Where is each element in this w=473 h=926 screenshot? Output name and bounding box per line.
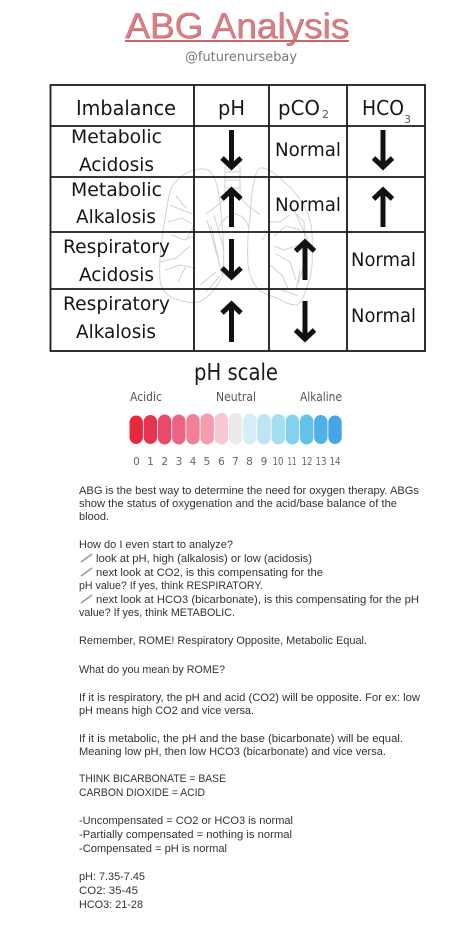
pH colour bar	[130, 413, 342, 444]
pH scale numbers: 8	[246, 456, 253, 468]
arrow: respiratory acidosis pH down	[222, 239, 241, 277]
row: respiratory alkalosis	[63, 293, 416, 343]
row: respiratory acidosis: Normal	[351, 249, 416, 271]
table grid	[50, 85, 425, 351]
pH scale labels	[130, 389, 342, 404]
pH scale numbers: 7	[232, 456, 239, 468]
icon: pen 3	[81, 595, 92, 603]
text block: ROME: Remember, ROME! Respiratory Opposite, Metabolic Equal.	[79, 635, 367, 647]
table	[50, 85, 425, 351]
text block: intro: ABG is the best way to determine the need for oxygen therapy. ABGs	[79, 485, 420, 497]
row: metabolic acidosis	[71, 126, 341, 176]
text block: how to analyze: next look at HCO3 (bicarbonate), is this compensating for the pH	[96, 594, 419, 606]
text block: intro: show the status of oxygenation and the acid/base balance of the	[79, 498, 397, 510]
arrow: respiratory alkalosis pH up	[222, 304, 241, 342]
title: ABG Analysis	[126, 6, 350, 47]
table header row: Imbalance	[76, 96, 176, 120]
row: respiratory alkalosis: Respiratory	[63, 293, 170, 315]
pH scale numbers: 12	[302, 456, 312, 468]
text block: ROME explained: If it is respiratory, the pH and acid (CO2) will be opposite. For ex: low	[79, 692, 420, 704]
pH scale labels: Neutral	[216, 389, 256, 404]
icon: pen 1	[81, 554, 92, 562]
pH scale numbers: 2	[161, 456, 168, 468]
text block: compensation: -Compensated = pH is normal	[79, 843, 227, 855]
table header row: 2	[322, 108, 329, 121]
row: metabolic alkalosis: Normal	[275, 194, 341, 216]
arrow: respiratory acidosis pCO2 up	[296, 242, 314, 280]
text block: normal values: HCO3: 21-28	[79, 899, 143, 911]
text block: how to analyze: look at pH, high (alkalosis) or low (acidosis)	[96, 553, 312, 565]
pH scale numbers: 6	[218, 456, 225, 468]
row: metabolic alkalosis: Metabolic	[71, 179, 162, 201]
pH scale numbers: 10	[272, 456, 284, 468]
pH scale numbers: 14	[330, 456, 341, 468]
subtitle: handle: @futurenursebay	[185, 50, 297, 65]
text block: compensation: -Partially compensated = nothing is normal	[79, 829, 292, 841]
table header row: pH	[218, 96, 245, 120]
table header row: pCO	[278, 96, 320, 120]
row: metabolic acidosis: Normal	[275, 139, 341, 161]
arrow: metabolic acidosis pH down	[222, 130, 241, 167]
text block: how to analyze: value? If yes, think METABOLIC.	[79, 607, 235, 619]
row: metabolic acidosis: Acidosis	[79, 154, 154, 176]
lungs watermark illustration	[160, 165, 312, 305]
text block: how to analyze: How do I even start to analyze?	[79, 539, 233, 551]
pH scale numbers: 4	[190, 456, 197, 468]
title: ABG Analysis	[125, 5, 349, 46]
text block: how to analyze: pH value? If yes, think RESPIRATORY.	[79, 580, 263, 592]
arrow: respiratory alkalosis pCO2 down	[296, 301, 314, 339]
pH scale numbers: 13	[316, 456, 326, 468]
pH scale numbers	[133, 456, 341, 468]
row: metabolic alkalosis: Alkalosis	[76, 206, 156, 228]
row: metabolic acidosis: Metabolic	[71, 126, 162, 148]
table header row	[76, 96, 411, 126]
table header row: 3	[404, 113, 411, 126]
text block: bicarbonate and carbon dioxide: THINK BICARBONATE = BASE	[79, 773, 226, 785]
arrow: metabolic acidosis HCO3 down	[374, 130, 392, 167]
row: respiratory alkalosis: Alkalosis	[76, 321, 156, 343]
text block: ROME explained: What do you mean by ROME?	[79, 664, 225, 676]
text block: ROME explained: pH means high CO2 and vice versa.	[79, 705, 254, 717]
text block: ROME explained: Meaning low pH, then low HCO3 (bicarbonate) and vice versa.	[79, 746, 386, 758]
row: respiratory acidosis: Acidosis	[79, 264, 154, 286]
row: respiratory alkalosis: Normal	[351, 305, 416, 327]
text block: bicarbonate and carbon dioxide: CARBON DIOXIDE = ACID	[79, 787, 205, 799]
text block: bicarbonate and carbon dioxide	[79, 773, 226, 799]
text block: ROME explained	[79, 664, 420, 758]
pH scale numbers: 3	[176, 456, 182, 468]
text block: intro	[79, 485, 420, 523]
pH scale numbers: 5	[204, 456, 210, 468]
pH scale labels: Acidic	[130, 389, 162, 404]
text block: how to analyze	[79, 539, 419, 619]
text block: intro: blood.	[79, 511, 109, 523]
arrow: metabolic alkalosis pH up	[222, 190, 241, 227]
pH scale numbers: 1	[147, 456, 154, 468]
text block: compensation: -Uncompensated = CO2 or HCO3 is normal	[79, 815, 293, 827]
arrow: metabolic alkalosis HCO3 up	[374, 190, 392, 227]
text block: normal values: pH: 7.35-7.45	[79, 871, 145, 883]
pH scale labels: Alkaline	[300, 389, 342, 404]
icon: pen 2	[81, 568, 92, 576]
text block: how to analyze: next look at CO2, is this compensating for the	[96, 567, 323, 579]
text block: normal values	[79, 871, 145, 911]
pH scale numbers: 9	[261, 456, 267, 468]
row: respiratory acidosis: Respiratory	[63, 236, 170, 258]
row: metabolic alkalosis	[71, 179, 341, 228]
heading: pH scale: pH scale	[194, 360, 278, 386]
pH scale numbers: 11	[288, 456, 296, 468]
pH scale numbers: 0	[133, 456, 140, 468]
text block: compensation	[79, 815, 293, 855]
table header row: HCO	[362, 96, 404, 120]
text block: ROME explained: If it is metabolic, the pH and the base (bicarbonate) will be equal.	[79, 733, 403, 745]
text block: normal values: CO2: 35-45	[79, 885, 138, 897]
row: respiratory acidosis	[63, 236, 416, 286]
